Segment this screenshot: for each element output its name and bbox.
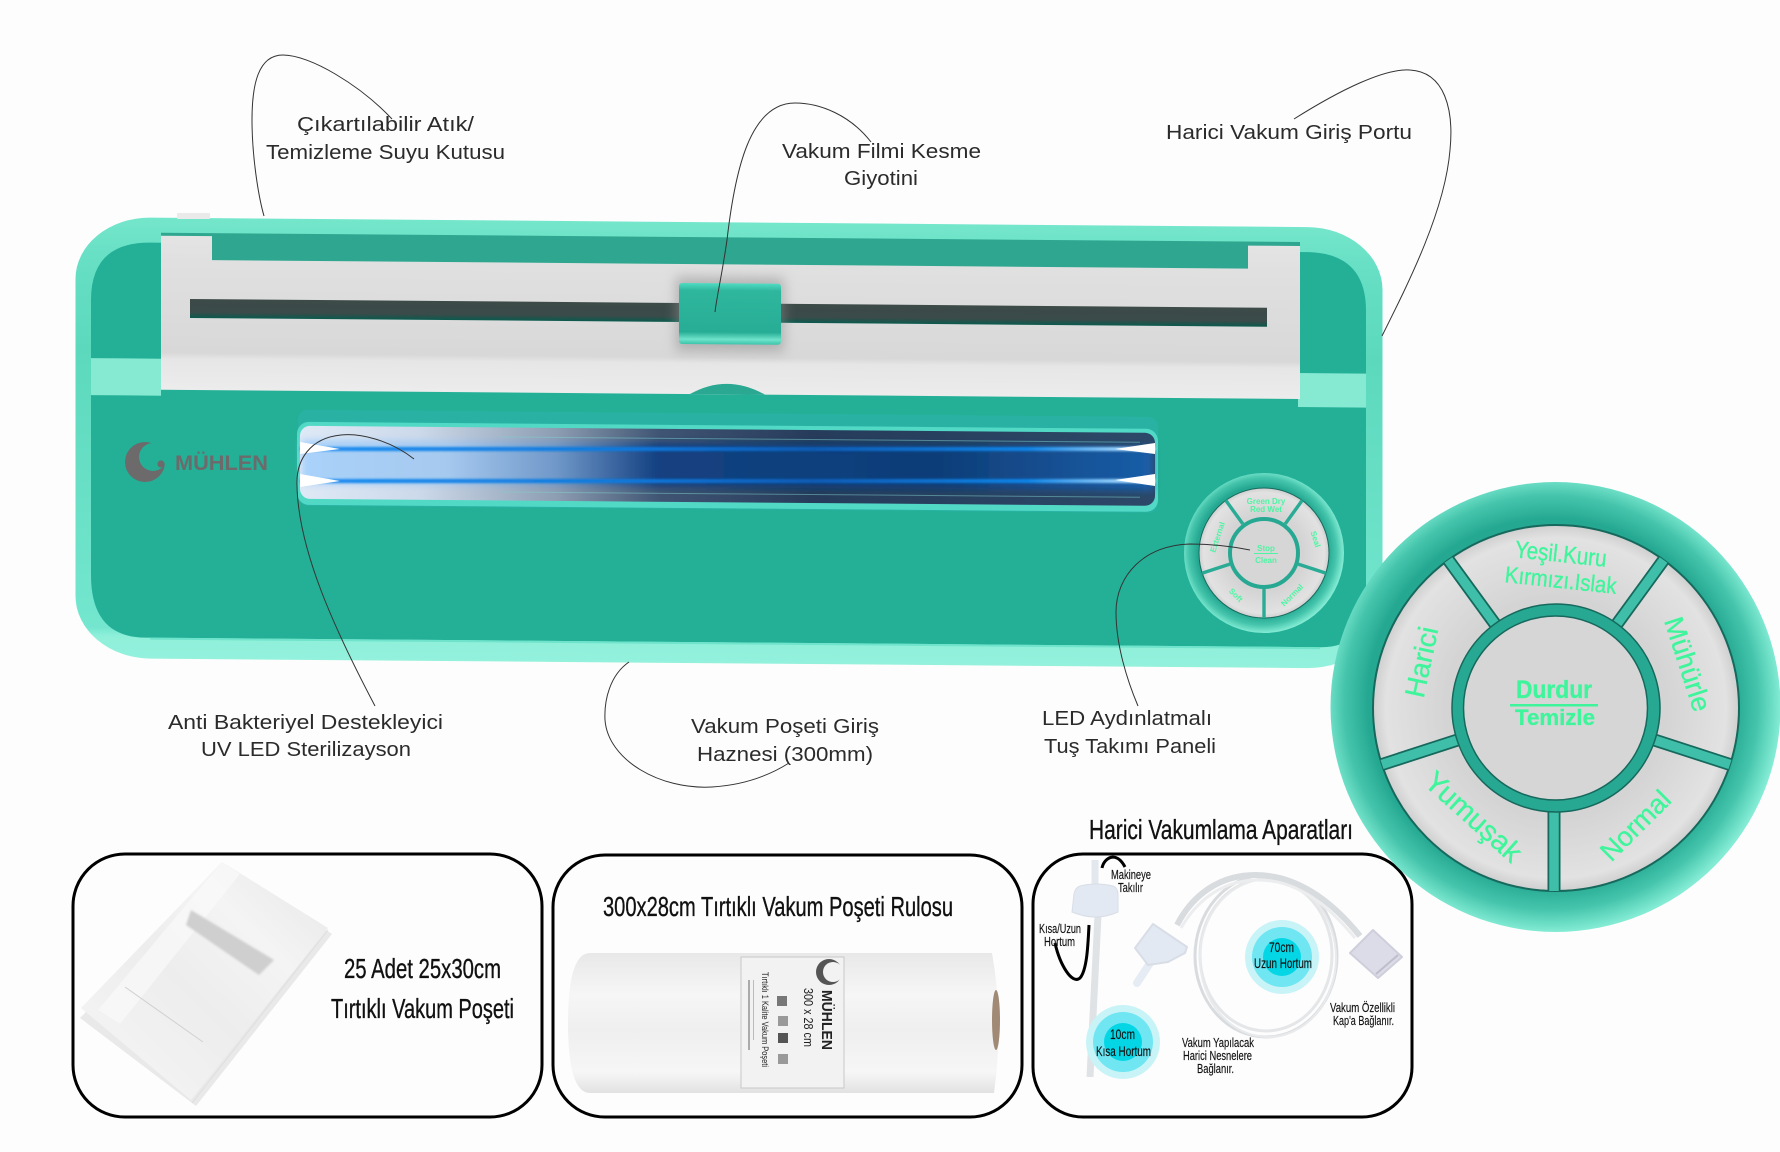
small annotations (1039, 867, 1395, 1076)
white guillotine panel (161, 236, 1300, 399)
leader line (715, 103, 871, 312)
label: Çıkartılabilir Atık/ (297, 114, 475, 136)
keypad labels: Temizle (1515, 705, 1595, 730)
label: Vakum Poşeti Giriş (691, 716, 879, 738)
small keypad rim (1184, 473, 1344, 633)
lower device rim highlight (150, 638, 1320, 649)
badge: 70cm (1245, 920, 1319, 994)
keypad center button (1464, 616, 1648, 800)
panel title: 300x28cm Tırtıklı Vakum Poşeti Rulosu (603, 891, 953, 922)
label (782, 141, 981, 190)
label: UV LED Sterilizayson (201, 739, 411, 761)
small annotations: Kısa/Uzun (1039, 921, 1081, 936)
roll label (741, 957, 844, 1088)
leader line (1116, 544, 1250, 706)
film slot (190, 299, 1267, 327)
label: Temizleme Suyu Kutusu (266, 142, 505, 164)
roll label: 300 x 28 cm (801, 988, 816, 1047)
logo mark (125, 442, 167, 482)
device green face (91, 242, 1366, 648)
leader line (1294, 70, 1451, 336)
bag text (331, 953, 514, 1024)
small keypad labels: Soft (1227, 587, 1245, 604)
leader line (605, 662, 789, 787)
heading: external accessories: Harici Vakumlama Aparatları (1089, 814, 1353, 845)
callout: UV LED (168, 435, 443, 761)
panel frame (553, 855, 1022, 1117)
badge: 70cm: 70cm (1269, 939, 1294, 955)
small annotations: Bağlanır. (1197, 1061, 1234, 1076)
small annotations: Makineye (1111, 867, 1151, 882)
small annotations: Vakum Özellikli (1330, 1000, 1395, 1015)
right connector (1350, 930, 1402, 978)
label: Vakum Filmi Kesme (782, 141, 981, 163)
callout: bag entry (605, 662, 879, 787)
logo: MÜHLEN (125, 442, 268, 482)
top small button (177, 213, 210, 219)
keypad spokes (1382, 560, 1730, 891)
UV window glass (300, 426, 1155, 506)
badge: 70cm: Uzun Hortum (1254, 955, 1312, 971)
small keypad (1184, 473, 1344, 633)
streak flares (300, 442, 1155, 487)
label: Anti Bakteriyel Destekleyici (168, 712, 443, 734)
small keypad labels: External (1208, 521, 1227, 554)
callout: removable waste box (252, 55, 505, 216)
panel: vacuum bags (73, 854, 542, 1117)
small keypad labels (1208, 497, 1322, 608)
keypad labels: Yumuşak (1418, 766, 1528, 869)
small keypad labels: Clean (1255, 556, 1277, 565)
vacuum sealer device (76, 217, 1382, 669)
small annotations: Kap'a Bağlanır. (1333, 1013, 1394, 1028)
roll label: MÜHLEN (818, 990, 835, 1050)
pointer curves (1055, 857, 1125, 979)
badge: 10cm: 10cm (1110, 1026, 1135, 1042)
label (266, 114, 505, 164)
upper streak glow (300, 447, 1155, 451)
bag text: Tırtıklı Vakum Poşeti (331, 993, 514, 1024)
small annotations: Vakum Yapılacak (1182, 1035, 1254, 1050)
small keypad labels: Green Dry (1247, 497, 1286, 506)
small annotations: Harici Nesnelere (1183, 1048, 1252, 1063)
panel: external accessories (1033, 854, 1412, 1117)
keypad labels: Yeşil.Kuru (1514, 536, 1608, 573)
keypad labels: Normal (1594, 784, 1677, 867)
panel frame (1033, 854, 1412, 1117)
slider shadow (676, 277, 784, 352)
label: Giyotini (844, 168, 918, 190)
device outer shell (76, 217, 1382, 669)
keypad labels: Mühürle (1658, 613, 1717, 715)
small keypad divider (1254, 553, 1278, 554)
logo text: MÜHLEN (175, 452, 268, 475)
short hose (1072, 860, 1118, 1077)
left light block (91, 358, 161, 396)
callout: cutter (715, 103, 981, 312)
small keypad labels: Red Wet (1250, 505, 1282, 514)
leader line (252, 55, 392, 216)
keypad labels: Harici (1399, 624, 1444, 700)
center divider (1510, 704, 1598, 706)
cutter slider (679, 283, 781, 345)
callout: external port (1166, 70, 1451, 336)
large keypad detail (1330, 482, 1780, 932)
left connector (1135, 924, 1187, 983)
small keypad labels: Normal (1279, 582, 1305, 608)
small keypad center (1230, 519, 1298, 587)
UV window blue band (302, 440, 1153, 491)
small keypad spokes (1202, 500, 1326, 618)
small keypad labels: Stop (1257, 544, 1275, 553)
label (168, 712, 443, 761)
keypad labels (1399, 536, 1717, 869)
roll label: Tırtıklı 1 Kalite Vakum Poşeti (760, 972, 770, 1067)
keypad labels: Kırmızı.Islak (1504, 561, 1618, 599)
panel: vacuum roll (553, 855, 1022, 1117)
label: LED Aydınlatmalı (1042, 708, 1212, 730)
right light block (1298, 373, 1366, 408)
UV window glow (298, 410, 1158, 513)
small annotations: Takılır (1118, 880, 1143, 895)
leader line (297, 435, 414, 706)
icon: bag stack (80, 862, 332, 1106)
keypad rim (1330, 482, 1780, 932)
panel frame (73, 854, 542, 1117)
long hose (1177, 875, 1360, 1037)
badge: 10cm (1086, 1005, 1160, 1079)
badge: 10cm: Kısa Hortum (1096, 1043, 1151, 1059)
keypad inner ring (1452, 604, 1660, 812)
panel bump (690, 384, 765, 395)
callout: LED keypad (1042, 544, 1250, 758)
label: Haznesi (300mm) (697, 744, 873, 766)
keypad labels: Durdur (1516, 676, 1592, 704)
bag text: 25 Adet 25x30cm (344, 953, 501, 984)
recessed top channel (161, 233, 1300, 272)
UV light streaks (300, 442, 1155, 487)
label (1042, 708, 1216, 758)
label: Tuş Takımı Paneli (1044, 736, 1216, 758)
icon: roll (568, 953, 1000, 1093)
UV window inner lines (500, 436, 1140, 498)
label: Harici Vakum Giriş Portu (1166, 122, 1412, 144)
small keypad buttons (1199, 488, 1329, 618)
small annotations: Hortum (1044, 934, 1075, 949)
label (691, 716, 879, 766)
keypad buttons disc (1373, 525, 1739, 891)
small keypad labels: Seal (1309, 530, 1322, 548)
lower streak glow (300, 479, 1155, 483)
UV window bezel (297, 422, 1158, 512)
